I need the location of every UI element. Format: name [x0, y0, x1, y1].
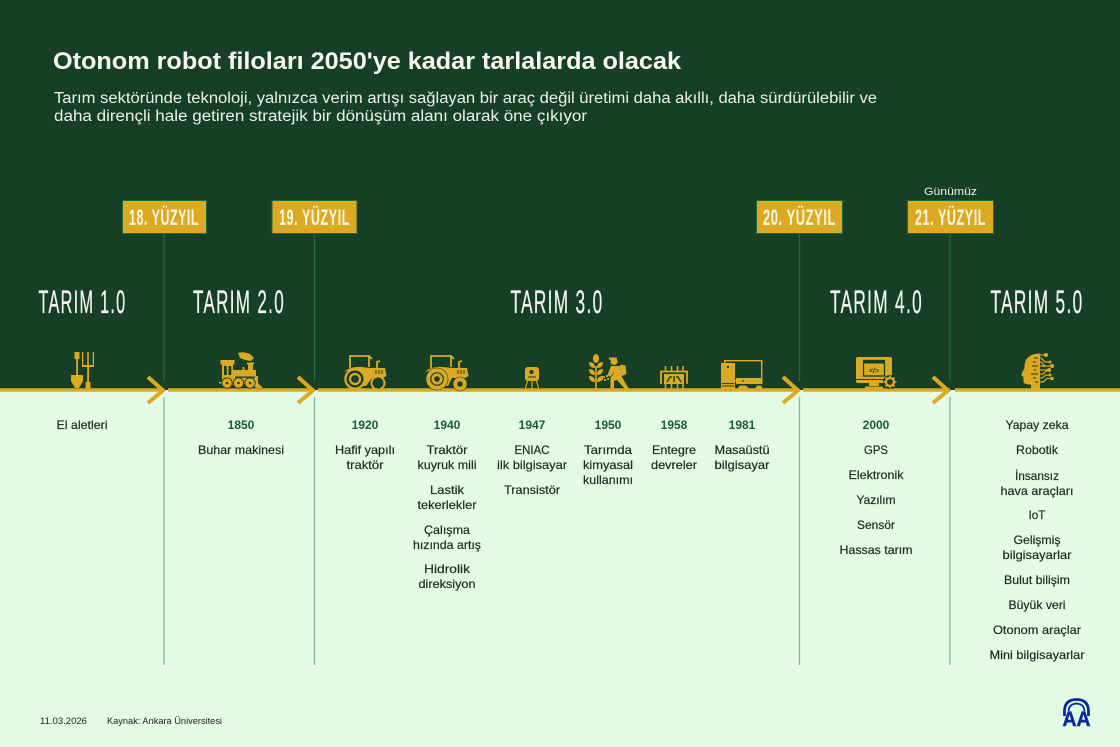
column: Tarım 5.0 items: bilgisayarlar: [1002, 548, 1072, 562]
column: 1958 items: [651, 418, 697, 472]
icon: integrated circuit: [661, 366, 687, 389]
timeline axis with arrows: [0, 377, 1120, 403]
column: 1981 items: Masaüstü: [714, 443, 770, 457]
column: 1920 items: 1920: [352, 418, 379, 432]
column: Tarım 5.0 items: IoT: [1028, 508, 1046, 522]
subtitle: Tarım sektöründe teknoloji, yalnızca verim artışı sağlayan bir araç değil üretimi daha akıllı, daha sürdürülebilir ve: [54, 90, 877, 107]
column: 1940 items: [413, 418, 481, 591]
column: 1958 items: Entegre: [652, 443, 696, 457]
column: 1958 items: 1958: [661, 418, 688, 432]
logo: AA: [1062, 700, 1090, 731]
icon: desktop computer: [721, 361, 763, 389]
column: 1947 items: ENIAC: [514, 443, 550, 457]
column: Tarım 2.0 items: Buhar makinesi: [198, 443, 284, 457]
column: Tarım 5.0 items: hava araçları: [1000, 484, 1074, 498]
column: Tarım 2.0 items: [198, 418, 284, 457]
column: Tarım 4.0 items: Hassas tarım: [840, 543, 912, 557]
century badge: 21. YÜZYIL: [908, 200, 994, 234]
title: Otonom robot filoları 2050'ye kadar tarlalarda olacak: [53, 48, 682, 75]
column: 1981 items: [714, 418, 770, 472]
column: 1950 items: [583, 418, 633, 487]
column: 1920 items: [335, 418, 395, 472]
column: 1940 items: 1940: [434, 418, 461, 432]
subtitle: [54, 90, 877, 125]
column: Tarım 5.0 items: Mini bilgisayarlar: [990, 648, 1084, 662]
column: Tarım 5.0 items: Büyük veri: [1008, 598, 1066, 612]
century badge: 21. YÜZYIL: 21. YÜZYIL: [915, 205, 986, 230]
century badge: 18. YÜZYIL: 18. YÜZYIL: [129, 205, 199, 230]
column: 1947 items: ilk bilgisayar: [497, 458, 567, 472]
column: 1950 items: 1950: [595, 418, 622, 432]
column: Tarım 5.0 items: Yapay zeka: [1006, 418, 1069, 432]
column: 1920 items: Hafif yapılı: [335, 443, 395, 457]
label: Günümüz: Günümüz: [924, 186, 977, 198]
column: Tarım 5.0 items: Otonom araçlar: [993, 623, 1081, 637]
column: Tarım 5.0 items: Robotik: [1016, 443, 1059, 457]
column: Tarım 5.0 items: Bulut bilişim: [1004, 573, 1070, 587]
column: 1940 items: Lastik: [430, 483, 465, 497]
logo: AA: AA: [1062, 708, 1090, 731]
column: Tarım 4.0 items: Yazılım: [856, 493, 896, 507]
column: Tarım 4.0 items: Sensör: [857, 518, 895, 532]
column: Tarım 4.0 items: [840, 418, 912, 557]
column: Tarım 5.0 items: Gelişmiş: [1014, 533, 1060, 547]
column: 1940 items: Traktör: [426, 443, 468, 457]
column: Tarım 4.0 items: GPS: [864, 443, 888, 457]
column: 1950 items: kullanımı: [583, 473, 633, 487]
column: Tarım 5.0 items: [990, 418, 1084, 662]
icon: steam locomotive: [219, 352, 263, 388]
century dividers: [164, 233, 950, 665]
century badge: 20. YÜZYIL: [756, 200, 842, 234]
column: 1920 items: traktör: [346, 458, 384, 472]
icon: tractor with rubber tyres: [425, 356, 468, 391]
column: 1940 items: direksiyon: [418, 577, 476, 591]
icon: light tractor: [344, 356, 386, 390]
century badge: 18. YÜZYIL: [122, 200, 206, 234]
era heading: TARIM 1.0: TARIM 1.0: [38, 284, 126, 320]
century badge: 19. YÜZYIL: 19. YÜZYIL: [279, 205, 350, 230]
icon: software monitor with gear: </>: [869, 368, 879, 375]
column: Tarım 4.0 items: 2000: [863, 418, 890, 432]
column: 1947 items: Transistör: [504, 483, 560, 497]
column: Tarım 1.0 items: El aletleri: [56, 418, 108, 432]
icon: hand tools: [71, 352, 94, 389]
column: 1940 items: hızında artış: [413, 538, 481, 552]
column: 1940 items: Hidrolik: [424, 562, 471, 576]
footer: source: Kaynak: Ankara Üniversitesi: [107, 716, 222, 726]
column: 1940 items: Çalışma: [424, 523, 470, 537]
era heading: TARIM 4.0: TARIM 4.0: [830, 284, 923, 320]
column: 1950 items: Tarımda: [584, 443, 632, 457]
column: 1940 items: tekerlekler: [418, 498, 476, 512]
column: 1958 items: devreler: [651, 458, 697, 472]
icon: software monitor with gear: [856, 357, 897, 389]
century badge: 19. YÜZYIL: [272, 200, 357, 234]
column: 1950 items: kimyasal: [583, 458, 633, 472]
icon: artificial intelligence head: [1021, 353, 1054, 390]
column: 1981 items: bilgisayar: [714, 458, 770, 472]
column: Tarım 5.0 items: İnsansız: [1015, 469, 1059, 483]
column: Tarım 2.0 items: 1850: [228, 418, 255, 432]
icon: wheat and sprayer farmer: [589, 354, 629, 389]
century badge: 20. YÜZYIL: 20. YÜZYIL: [763, 205, 836, 230]
subtitle: daha dirençli hale getiren stratejik bir dönüşüm alanı olarak öne çıkıyor: [54, 108, 587, 125]
era heading: TARIM 2.0: TARIM 2.0: [193, 284, 285, 320]
icon: ENIAC computer: [525, 367, 539, 389]
column: 1981 items: 1981: [729, 418, 756, 432]
column: Tarım 4.0 items: Elektronik: [848, 468, 905, 482]
column: 1947 items: [497, 418, 567, 497]
era heading: TARIM 3.0: TARIM 3.0: [510, 284, 604, 320]
column: 1947 items: 1947: [519, 418, 546, 432]
footer: date: 11.03.2026: [40, 716, 87, 726]
column: 1940 items: kuyruk mili: [418, 458, 476, 472]
